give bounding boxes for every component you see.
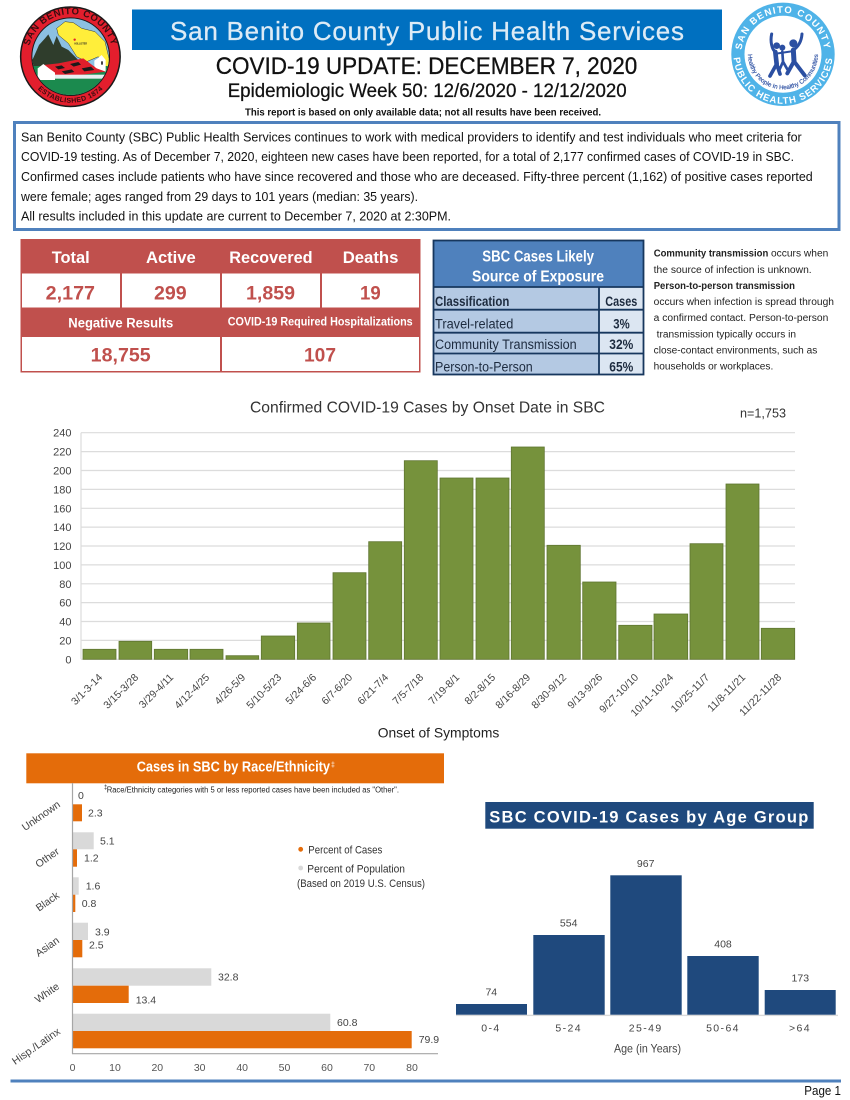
y axis labels: 20 <box>59 635 72 647</box>
panel: source of exposure table: 32% <box>609 337 633 352</box>
panel: source of exposure table: SBC Cases Likely <box>482 249 594 266</box>
panel: case totals table: 18,755 <box>91 346 151 367</box>
category labels: Hisp./Latinx <box>10 1025 63 1068</box>
text: transmission definitions: occurs when <box>771 249 828 260</box>
x axis labels: 6/7-6/20 <box>319 672 355 707</box>
value labels: 173 <box>792 972 809 984</box>
x axis labels <box>69 672 784 719</box>
x axis labels: 9/13-9/26 <box>565 672 605 711</box>
text: report disclaimer: This report is based on only available data; not all results have been received. <box>245 108 601 119</box>
value labels: 5.1 <box>100 835 115 847</box>
x axis labels: 3/15-3/28 <box>101 672 141 711</box>
value labels: 32.8 <box>218 972 239 984</box>
x axis labels: 10/25-11/7 <box>669 672 712 715</box>
panel: source of exposure table: 3% <box>613 316 630 331</box>
y axis labels: 100 <box>53 560 72 572</box>
x axis labels: 6/21-7/4 <box>355 672 391 707</box>
value labels: 79.9 <box>419 1034 439 1046</box>
logo: Public Health Services seal: Healthy People In Healthy Communities <box>748 54 818 90</box>
value labels <box>485 858 809 998</box>
text: race footnote: Race/Ethnicity categories with 5 or less reported cases have been included as "Other". <box>107 785 399 794</box>
x axis labels: 10/11-10/24 <box>629 672 676 719</box>
x axis labels: 8/16-8/29 <box>493 672 533 711</box>
panel: case totals table: Negative Results <box>68 316 173 331</box>
panel: case totals table: Deaths <box>343 248 398 267</box>
x axis labels: 3/29-4/11 <box>137 672 176 711</box>
value labels: 554 <box>560 918 578 930</box>
panel: case totals table: 1,859 <box>246 283 295 304</box>
value labels: 2.5 <box>89 940 104 952</box>
panel: intro summary <box>14 122 839 230</box>
y axis labels: 0 <box>65 654 72 666</box>
banner: department title: San Benito County Public Health Services <box>170 16 684 46</box>
panel: case totals table: Total <box>52 248 90 267</box>
panel: source of exposure table: Cases <box>605 294 637 309</box>
value labels: 1.6 <box>86 881 100 893</box>
value labels: 13.4 <box>136 994 156 1006</box>
bar chart: cases by onset date <box>53 428 795 719</box>
heading: age group banner: SBC COVID-19 Cases by Age Group <box>489 809 808 827</box>
heading: update date: COVID-19 UPDATE: DECEMBER 7, 2020 <box>216 53 637 80</box>
text: transmission definitions: close-contact environments, such as <box>654 345 817 356</box>
logo: San Benito County seal <box>20 6 121 108</box>
banner: department title <box>132 10 722 50</box>
logo: Public Health Services seal <box>731 2 835 106</box>
panel: source of exposure table: 65% <box>609 359 633 374</box>
x axis labels: 5/24-6/6 <box>283 672 319 707</box>
case bars <box>72 804 412 1048</box>
x axis labels: 4/12-4/25 <box>172 672 212 711</box>
text: race footnote: ‡ <box>104 785 107 791</box>
value labels: 967 <box>637 858 655 870</box>
heading: age group banner <box>485 802 814 829</box>
bars <box>83 447 795 659</box>
panel: case totals table: 19 <box>360 283 381 304</box>
text: sample size: n=1,753 <box>740 406 786 420</box>
panel: case totals table <box>20 239 420 372</box>
text: transmission definitions: Person-to-person transmission <box>654 281 795 292</box>
y axis labels <box>53 428 72 666</box>
panel: case totals table: COVID-19 Required Hospitalizations <box>228 314 413 328</box>
value labels: 74 <box>485 986 497 998</box>
value labels: 3.9 <box>95 926 110 938</box>
logo: San Benito County seal: SAN BENITO COUNTY <box>24 8 118 46</box>
x axis labels: 20 <box>151 1062 163 1074</box>
value labels: 0 <box>78 790 84 802</box>
x axis labels: 10 <box>109 1062 121 1074</box>
panel: case totals table: Recovered <box>229 248 313 267</box>
category labels: White <box>33 981 62 1006</box>
logo: Public Health Services seal: PUBLIC HEALTH SERVICES <box>734 57 832 104</box>
y axis labels: 240 <box>53 428 72 440</box>
heading: race and ethnicity banner: ‡ <box>331 762 335 769</box>
value labels: 1.2 <box>84 853 99 865</box>
value labels: 0.8 <box>82 898 96 910</box>
x axis labels: 9/27-10/10 <box>597 672 641 716</box>
text: transmission definitions <box>654 249 834 372</box>
heading: race and ethnicity banner <box>26 753 444 783</box>
heading: race and ethnicity banner: Cases in SBC by Race/Ethnicity <box>137 760 330 776</box>
text: onset axis title: Onset of Symptoms <box>378 725 499 741</box>
category labels <box>481 1023 811 1035</box>
population bars <box>72 832 330 1031</box>
value labels: 2.3 <box>88 808 103 820</box>
x axis labels: 50 <box>279 1062 290 1074</box>
category labels: Other <box>33 845 62 871</box>
text: page number: Page 1 <box>804 1083 841 1098</box>
text: transmission definitions: households or workplaces. <box>654 361 773 372</box>
panel: case totals table: 107 <box>304 346 336 367</box>
panel: source of exposure table: Travel-related <box>435 316 513 331</box>
panel: source of exposure table: Person-to-Person <box>435 359 533 374</box>
category labels: >64 <box>789 1023 811 1035</box>
legend: race chart: Percent of Cases <box>308 845 383 857</box>
legend: race chart: (Based on 2019 U.S. Census) <box>297 878 425 890</box>
x axis labels: 30 <box>194 1062 206 1074</box>
value labels <box>78 790 439 1046</box>
x axis labels: 60 <box>321 1062 333 1074</box>
bar chart: cases by age group <box>456 858 838 1056</box>
text: transmission definitions: occurs when infection is spread through <box>654 297 834 308</box>
panel: source of exposure table: Community Transmission <box>435 337 577 352</box>
x axis labels: 7/19-8/1 <box>426 672 462 707</box>
panel: intro summary: COVID-19 testing. As of December 7, 2020, eighteen new cases have been reported, for a total of 2,177 confirmed cases of COVID-19 in SBC. <box>21 149 794 164</box>
heading: onset chart title: Confirmed COVID-19 Cases by Onset Date in SBC <box>250 400 605 417</box>
panel: case totals table: 299 <box>154 283 187 304</box>
x axis labels: 0 <box>70 1062 76 1074</box>
category labels: 25-49 <box>629 1023 663 1035</box>
text: transmission definitions: transmission typically occurs in <box>657 329 796 340</box>
panel: intro summary: San Benito County (SBC) Public Health Services continues to work with medical providers to identify and test individuals who meet criteria for <box>21 129 802 144</box>
x axis labels: 8/30-9/12 <box>529 672 569 711</box>
x axis labels: 4/26-5/9 <box>212 672 248 707</box>
logo: San Benito County seal: HOLLISTER <box>74 41 88 45</box>
legend: race chart: Percent of Population <box>307 863 405 875</box>
panel: intro summary: Confirmed cases include patients who have since recovered and those who are deceased. Fifty-three percent (1,162) of positive cases reported <box>21 169 813 184</box>
legend: race chart <box>297 845 425 890</box>
panel: intro summary: All results included in this update are current to December 7, 2020 at 2:30PM. <box>21 209 451 224</box>
panel: source of exposure table: Source of Exposure <box>472 269 604 286</box>
value labels: 408 <box>714 939 732 951</box>
y axis labels: 60 <box>59 598 72 610</box>
category labels: Asian <box>33 935 62 960</box>
panel: case totals table: 2,177 <box>46 283 95 304</box>
x axis labels <box>70 1062 418 1074</box>
y axis labels: 120 <box>53 541 72 553</box>
logo: Public Health Services seal: SAN BENITO COUNTY <box>736 6 831 50</box>
x axis labels: 40 <box>236 1062 248 1074</box>
text: transmission definitions: Community transmission <box>654 249 768 260</box>
y axis labels: 160 <box>53 503 72 515</box>
panel: case totals table: Active <box>146 248 196 267</box>
x axis labels: 70 <box>363 1062 375 1074</box>
category labels: 50-64 <box>706 1023 740 1035</box>
y axis labels: 80 <box>59 579 72 591</box>
value labels: 60.8 <box>337 1017 358 1029</box>
y axis labels: 220 <box>53 447 72 459</box>
x axis labels: 11/8-11/21 <box>705 672 748 715</box>
y axis labels: 40 <box>59 616 72 628</box>
category labels: Black <box>34 889 62 914</box>
y axis labels: 180 <box>53 484 72 496</box>
bar chart: cases by race and ethnicity <box>10 783 439 1074</box>
category labels: Unknown <box>20 799 63 834</box>
x axis labels: 3/1-3-14 <box>69 672 105 708</box>
text: transmission definitions: a confirmed contact. Person-to-person <box>654 313 828 324</box>
heading: epidemiologic week: Epidemiologic Week 50: 12/6/2020 - 12/12/2020 <box>228 81 627 102</box>
category labels <box>10 799 63 1068</box>
y axis labels: 200 <box>53 466 72 478</box>
panel: source of exposure table <box>434 240 644 374</box>
category labels: 0-4 <box>481 1023 501 1035</box>
x axis labels: 5/10-5/23 <box>244 672 284 711</box>
x axis labels: 11/22-11/28 <box>737 672 784 719</box>
y axis labels: 140 <box>53 522 72 534</box>
x axis labels: 80 <box>406 1062 418 1074</box>
panel: source of exposure table: Classification <box>435 294 509 309</box>
x axis labels: 7/5-7/18 <box>390 672 426 707</box>
panel: intro summary: were female; ages ranged from 29 days to 101 years (median: 35 years). <box>20 189 418 204</box>
category labels: 5-24 <box>555 1023 582 1035</box>
x axis labels: 8/2-8/15 <box>462 672 498 707</box>
logo: San Benito County seal: ESTABLISHED 1874 <box>38 86 102 103</box>
axis title: Age (in Years) <box>614 1042 681 1056</box>
text: transmission definitions: the source of infection is unknown. <box>654 265 812 276</box>
